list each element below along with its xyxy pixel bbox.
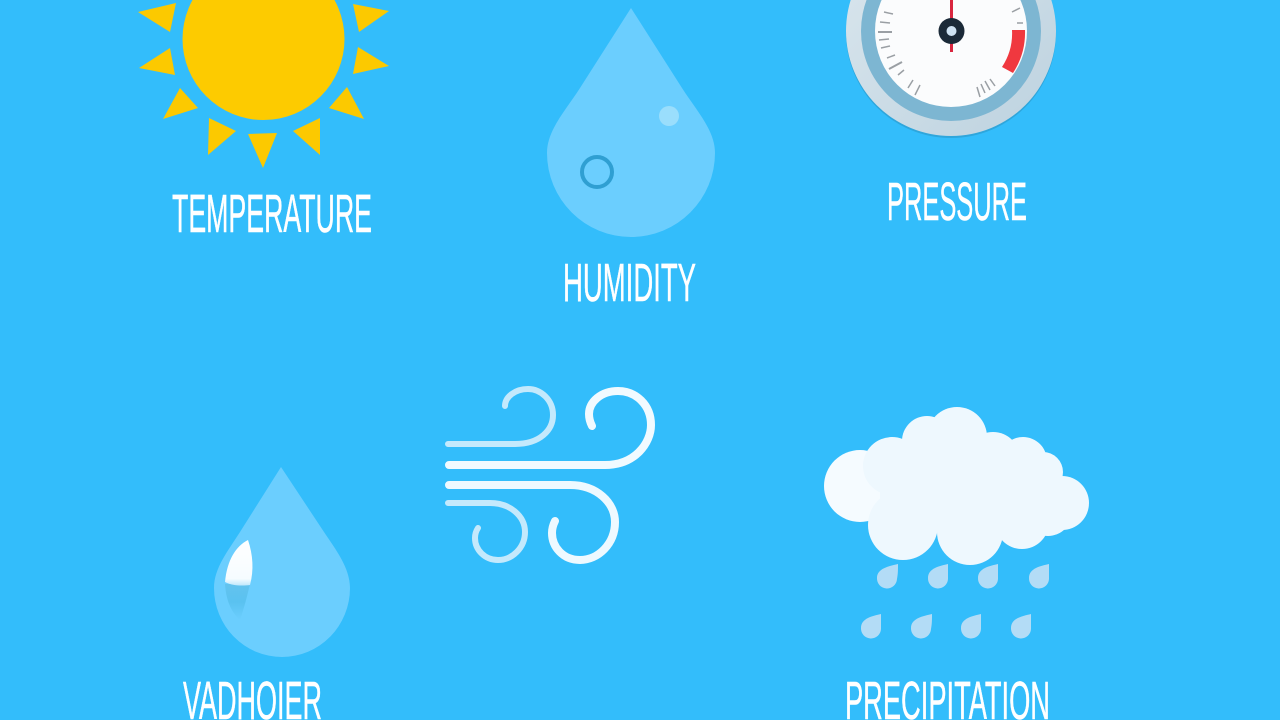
- icon: vapour water drop: [214, 467, 350, 657]
- label: humidity: HUMIDITY: [563, 253, 696, 313]
- rain drops: [861, 564, 1049, 639]
- gauge needle: [950, 0, 953, 52]
- panel: pressure: PRESSURE: [887, 172, 1027, 232]
- panel: humidity: [547, 8, 715, 313]
- gauge red zone: [1002, 30, 1025, 73]
- panel: temperature: [138, 0, 389, 244]
- icon: wind: [448, 389, 651, 560]
- icon: humidity water drop: [547, 8, 715, 237]
- panel: pressure: [846, 0, 1056, 232]
- icon: pressure gauge: [846, 0, 1056, 138]
- gauge tick marks: [878, 8, 1023, 97]
- panel: water vapour: [183, 467, 350, 720]
- icon: sun: [138, 0, 389, 168]
- panel: precipitation: [824, 407, 1089, 720]
- icon: rain cloud: [824, 407, 1089, 639]
- panel: temperature: TEMPERATURE: [172, 184, 372, 244]
